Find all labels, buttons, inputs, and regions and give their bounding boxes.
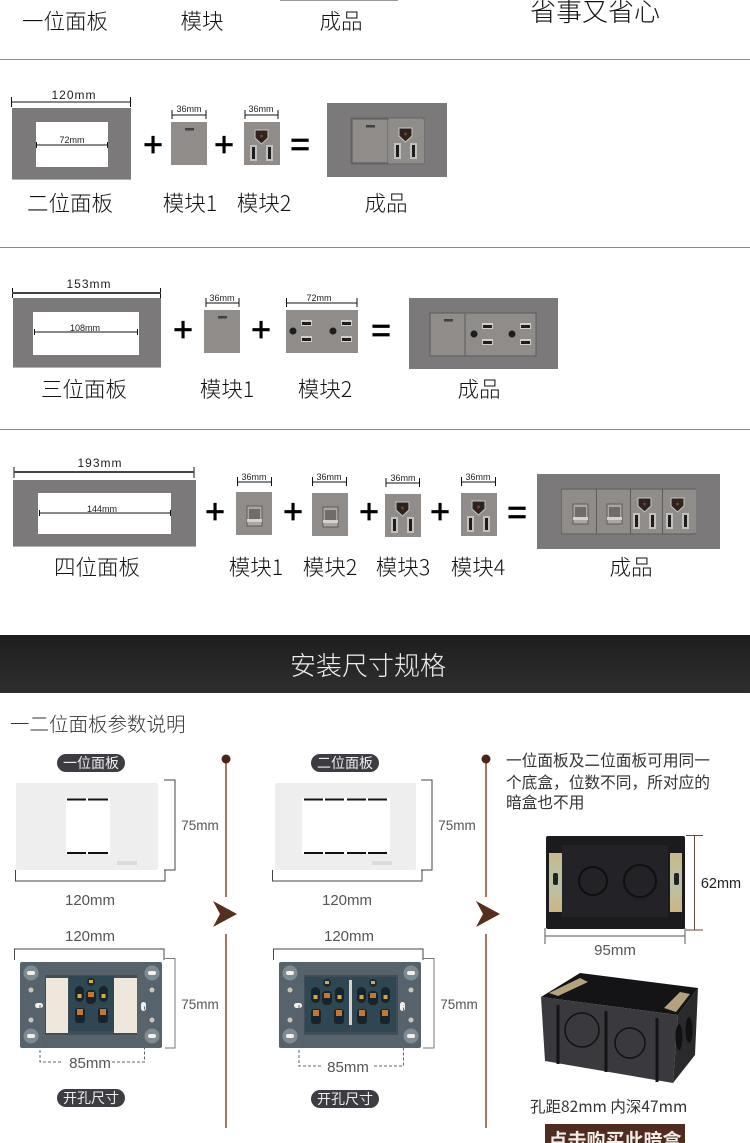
labels: 二位面板 [27, 187, 113, 218]
module 2: 36mm [316, 472, 342, 482]
timeline 2 [476, 754, 500, 1128]
labels: 模块2 [303, 551, 357, 582]
row 4: four-position panel [13, 456, 720, 582]
text: 95mm [594, 942, 636, 959]
subheading: 一二位面板参数说明 [10, 708, 186, 737]
column: one-position panel: 75mm [181, 818, 219, 833]
plate dimensions [14, 949, 175, 1048]
operator: + [359, 493, 379, 531]
note text: 个底盒，位数不同，所对应的 [506, 773, 710, 792]
banner: install dimensions: 安装尺寸规格 [290, 646, 446, 683]
panel dimensions [16, 780, 175, 881]
three-position frame: 108mm [70, 323, 100, 333]
row 1 fragment: top labels: 模块 [180, 5, 224, 36]
module 2 [286, 293, 358, 353]
labels: 模块1 [200, 373, 254, 404]
two-position frame: 72mm [59, 135, 85, 145]
labels: 成品 [457, 373, 501, 404]
column: one-position panel: 75mm [181, 997, 219, 1012]
labels [41, 373, 501, 404]
finished product [537, 474, 720, 549]
operator: + [143, 126, 163, 164]
column: two-position panel [272, 753, 478, 1109]
operator: + [205, 493, 225, 531]
row 1 fragment: top labels: 一位面板 [22, 5, 108, 36]
panel dimensions [272, 780, 432, 881]
three-position frame: 153mm [66, 277, 112, 291]
row 1 fragment: top labels: 成品 [319, 5, 363, 36]
row 2: two-position panel [12, 88, 447, 218]
hole spacing [40, 1005, 144, 1072]
labels: 模块4 [451, 551, 505, 582]
module 2: 36mm [248, 104, 274, 114]
pill label: 一位面板 [63, 753, 119, 773]
module 3 [385, 473, 421, 537]
module 1 [236, 472, 272, 535]
note text [506, 752, 710, 812]
module 2: 72mm [306, 293, 332, 303]
operator: + [430, 493, 450, 531]
finished product [327, 103, 447, 177]
column: one-position panel: 120mm [65, 928, 115, 945]
module 2 [312, 472, 348, 536]
mounting plate [279, 962, 421, 1048]
labels: 模块1 [163, 187, 217, 218]
pill label: 开孔尺寸 [63, 1088, 119, 1108]
module 1: 36mm [241, 472, 267, 482]
white panel [275, 783, 416, 870]
hole spacing: 85mm [69, 1055, 111, 1072]
text: 62mm [701, 876, 741, 892]
row 3: three-position panel [12, 277, 558, 404]
two-position frame: 120mm [51, 88, 97, 102]
operator: + [173, 311, 193, 349]
hole spacing: 85mm [327, 1059, 369, 1076]
hole spacing [299, 1005, 404, 1076]
labels: 模块2 [237, 187, 291, 218]
module 1 [171, 104, 207, 165]
module 1: 36mm [209, 293, 235, 303]
column: one-position panel: 120mm [65, 892, 115, 909]
back box perspective view [541, 973, 698, 1083]
operator: = [507, 494, 527, 532]
labels: 成品 [364, 187, 408, 218]
note text: 暗盒也不用 [506, 794, 584, 812]
finished product [409, 298, 558, 369]
module 2 [244, 104, 280, 165]
operator: + [251, 311, 271, 349]
note text: 一位面板及二位面板可用同一 [506, 752, 710, 770]
three-position frame [12, 277, 161, 368]
four-position frame: 193mm [77, 456, 123, 470]
labels: 模块1 [229, 551, 283, 582]
timeline 1 [213, 754, 237, 1128]
back box dimensions [545, 836, 703, 944]
back box caption: 孔距82mm 内深47mm [530, 1095, 687, 1117]
white panel [16, 783, 158, 870]
pill label: 开孔尺寸 [317, 1089, 373, 1109]
labels: 模块3 [376, 551, 430, 582]
column: two-position panel: 120mm [322, 892, 372, 909]
column: two-position panel: 75mm [440, 997, 478, 1012]
four-position frame: 144mm [87, 504, 117, 514]
module 3: 36mm [390, 473, 416, 483]
labels: 四位面板 [54, 551, 140, 582]
operator: = [371, 312, 391, 350]
labels: 成品 [609, 551, 653, 582]
labels: 模块2 [298, 373, 352, 404]
labels [27, 187, 408, 218]
mounting plate [20, 962, 162, 1048]
module 1 [204, 293, 240, 353]
module 4 [461, 472, 497, 536]
two-position frame [12, 88, 131, 180]
banner: install dimensions [0, 635, 750, 693]
back box top view [546, 836, 685, 929]
row 1 fragment: top labels [22, 0, 660, 36]
operator: = [290, 126, 310, 164]
labels: 三位面板 [41, 373, 127, 404]
plate dimensions [274, 949, 434, 1048]
pill label: 二位面板 [317, 753, 373, 773]
module 1: 36mm [176, 104, 202, 114]
column: two-position panel: 120mm [324, 928, 374, 945]
labels [54, 551, 653, 582]
module 4: 36mm [465, 472, 491, 482]
column: two-position panel: 75mm [438, 818, 476, 833]
operator: + [283, 493, 303, 531]
column: one-position panel [14, 753, 219, 1108]
operator: + [214, 126, 234, 164]
four-position frame [13, 456, 196, 547]
